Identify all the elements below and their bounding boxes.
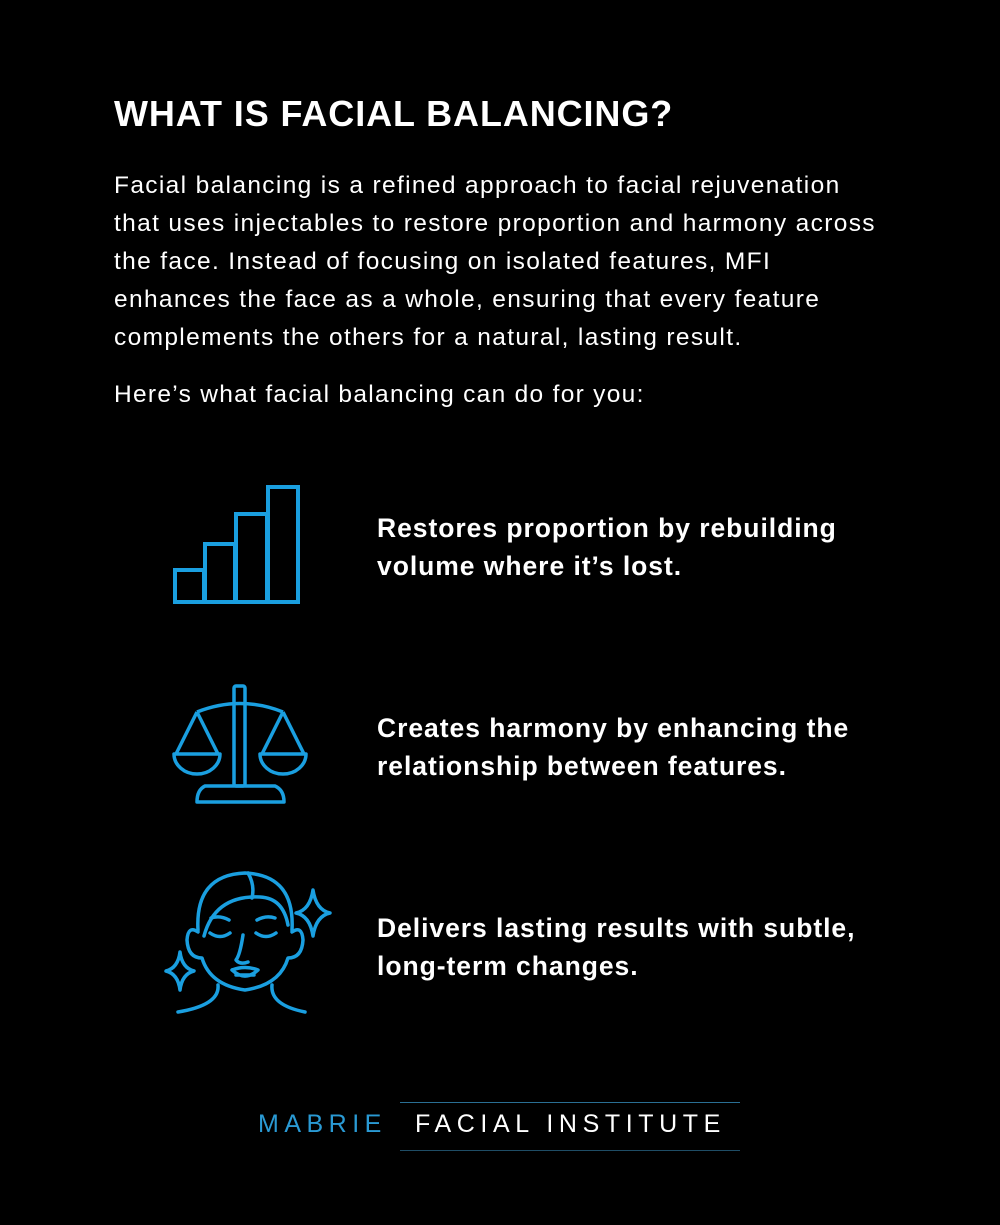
benefit 3 text: Delivers lasting results with subtle, [377,913,855,943]
benefit 2 text: relationship between features. [377,751,787,781]
intro paragraph: complements the others for a natural, lasting result. [114,324,743,351]
benefit 3 text: long-term changes. [377,951,639,981]
logo: MABRIE [258,1110,387,1138]
intro paragraph: enhances the face as a whole, ensuring that every feature [114,286,820,313]
benefit 2 text [377,713,849,781]
intro paragraph: that uses injectables to restore proportion and harmony across [114,210,876,237]
benefit 1 text: Restores proportion by rebuilding [377,513,837,543]
benefit 1 text [377,513,837,581]
intro paragraph: Facial balancing is a refined approach to facial rejuvenation [114,172,841,199]
intro paragraph: the face. Instead of focusing on isolated features, MFI [114,248,771,275]
logo [258,1102,740,1151]
intro paragraph [114,172,876,351]
title: WHAT IS FACIAL BALANCING? [114,93,673,134]
lead-in text: Here’s what facial balancing can do for you: [114,381,645,408]
icon: bar chart [173,485,300,604]
icon: face with sparkles [164,871,332,1014]
icon: scales [172,684,308,804]
logo: FACIAL INSTITUTE [415,1110,726,1138]
benefit 3 text [377,913,855,981]
benefit 1 text: volume where it’s lost. [377,551,682,581]
benefit 2 text: Creates harmony by enhancing the [377,713,849,743]
